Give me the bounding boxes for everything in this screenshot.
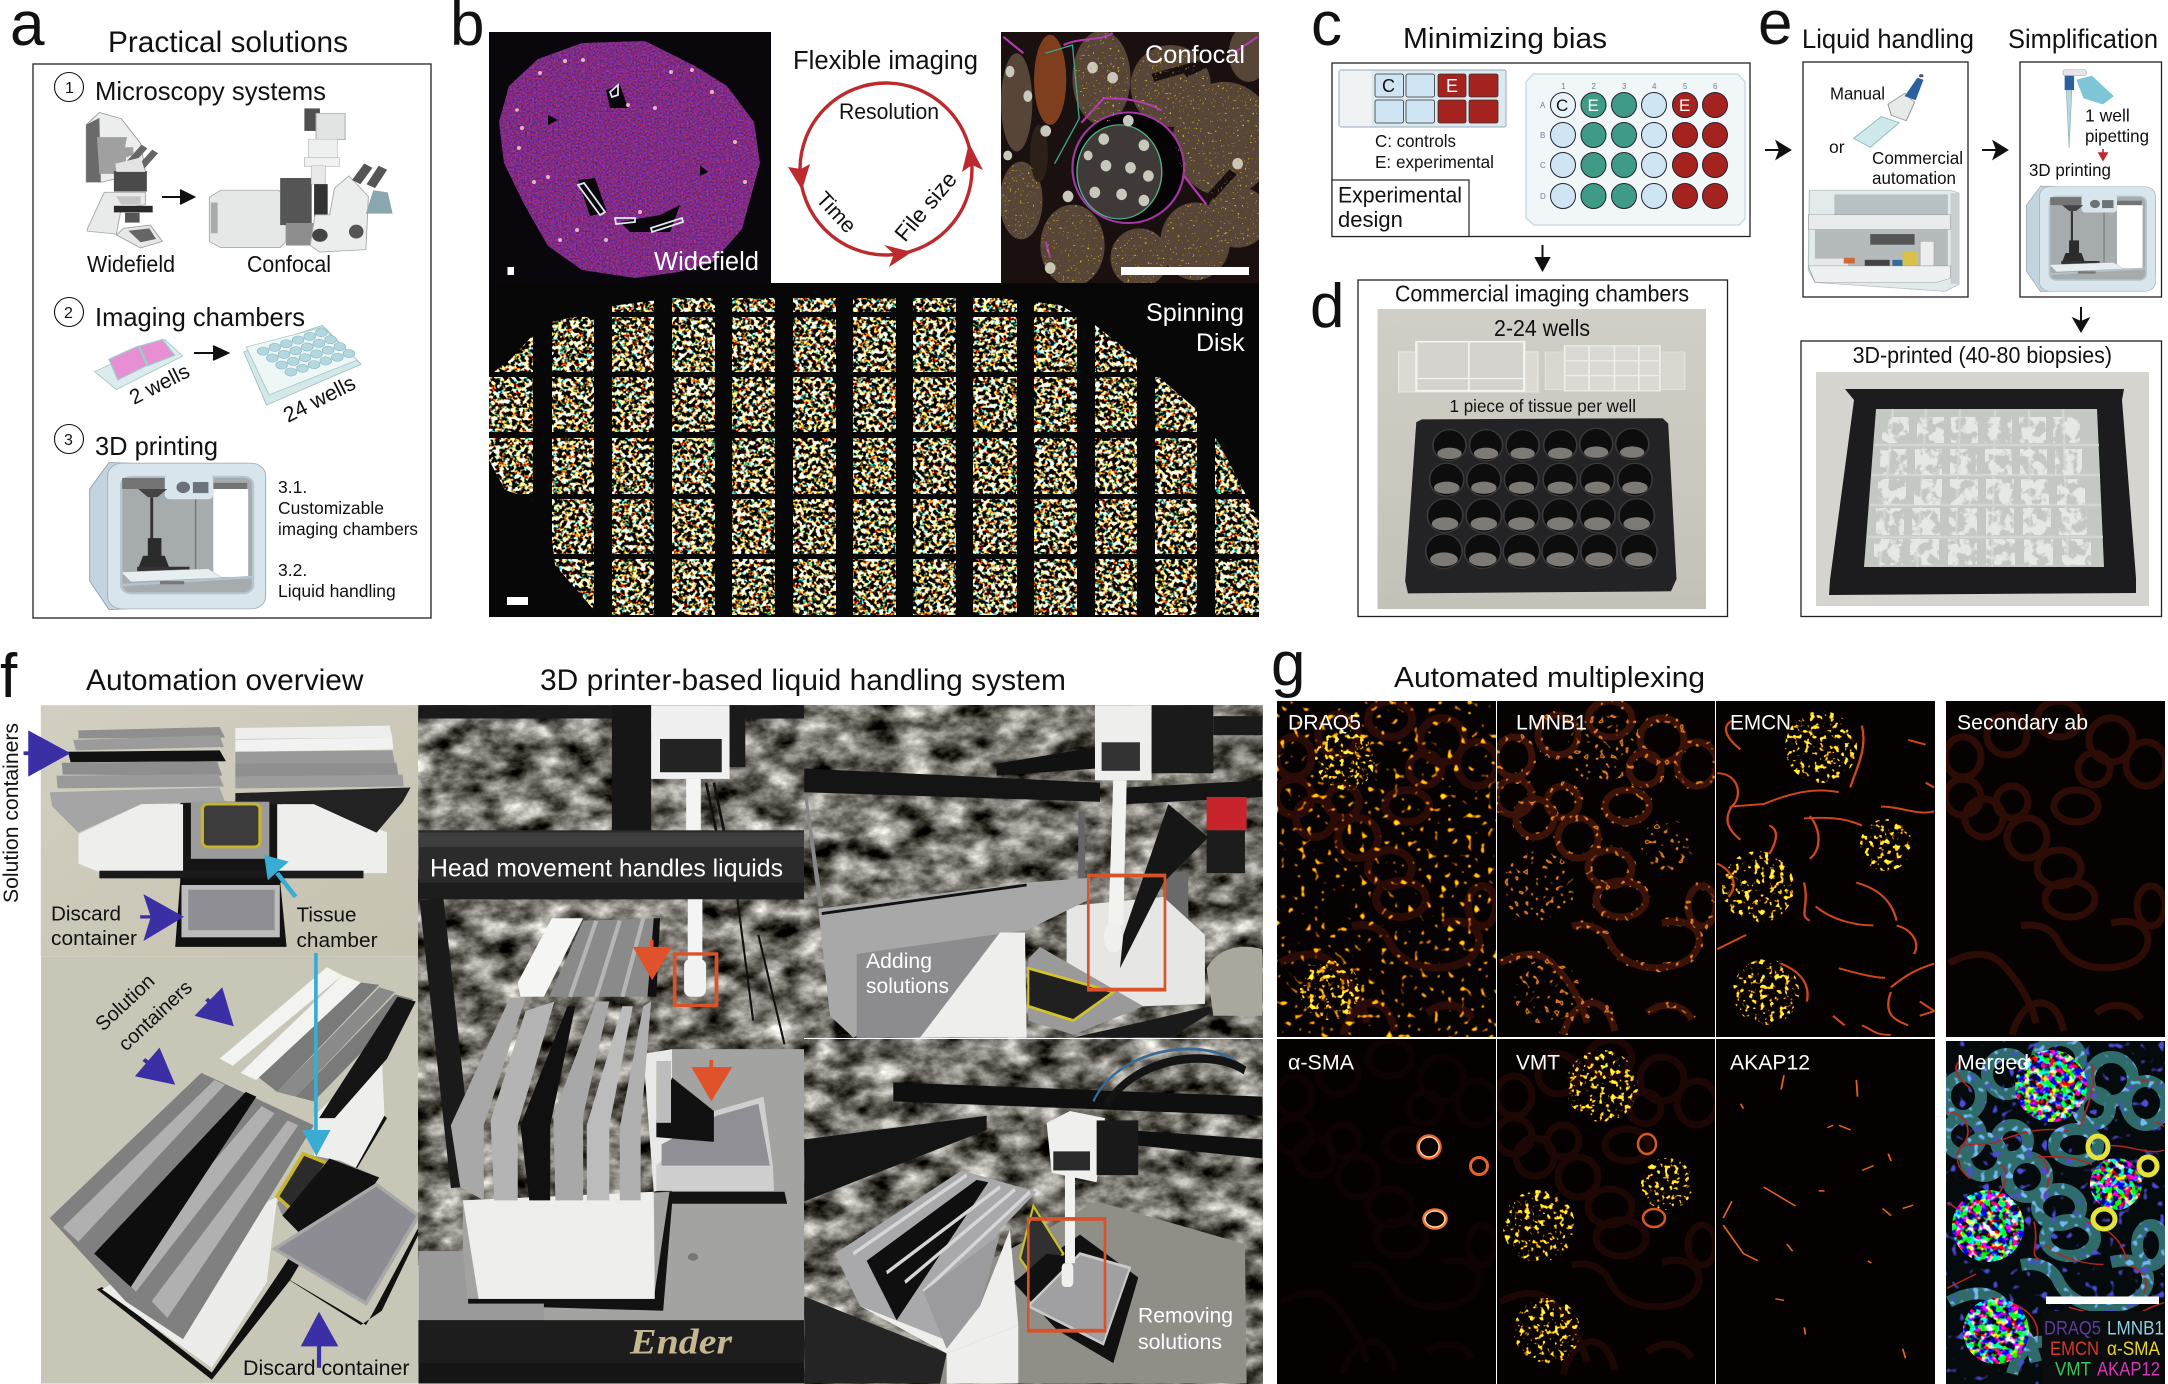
arrow: upper solution containers [195, 987, 234, 1026]
image: LMNB1 [1496, 701, 1717, 1037]
plastic slides [1399, 342, 1685, 392]
label: commercial automation: automation [1872, 168, 1956, 188]
plate row letters: A [1540, 101, 1546, 110]
spinning disk image [489, 283, 1259, 617]
well label E: E [1446, 76, 1458, 96]
well label E red: E [1679, 96, 1690, 115]
box: simplified pipetting and printing [2020, 62, 2162, 297]
icon: manual pipette and plate [1854, 74, 1923, 147]
photo: removing solutions [804, 1039, 1263, 1384]
heading: 3D-printed: 3D-printed (40-80 biopsies) [1853, 342, 2112, 368]
well label C: C [1556, 96, 1568, 115]
icon: 3D printer [90, 462, 266, 610]
panel f: automation overview [0, 642, 1263, 1384]
label: 24 wells: 24 wells [279, 371, 359, 427]
label: AKAP12: AKAP12 [1730, 1052, 1810, 1075]
arrow [1765, 142, 1790, 158]
note: customizable imaging chambers: imaging chambers [278, 519, 418, 539]
icon: confocal microscope [209, 108, 393, 252]
heading: 3D printer-based liquid handling system: 3D printer-based liquid handling system [540, 664, 1066, 697]
box: experimental design: design [1338, 207, 1403, 232]
label: 2-24 wells: 2-24 wells [1494, 315, 1590, 341]
scale bar [1121, 267, 1249, 275]
heading: microscopy systems: Microscopy systems [95, 76, 326, 106]
label: adding solutions: Adding [866, 950, 932, 973]
heading: flexible imaging: Flexible imaging [793, 47, 978, 75]
heading: imaging chambers: Imaging chambers [95, 302, 305, 332]
label: removing solutions: solutions [1138, 1331, 1222, 1354]
panel c: minimizing bias [1311, 0, 1750, 270]
label: spinning disk: Spinning [1146, 299, 1244, 327]
24-well plate layout [1526, 74, 1745, 225]
panel a: practical solutions [10, 0, 431, 618]
arrow [162, 190, 194, 204]
legend: α-SMA [2107, 1339, 2160, 1360]
legend: controls and experimental: E: experimental [1375, 152, 1494, 172]
photo: adding solutions [804, 705, 1263, 1038]
image: alpha-SMA [1276, 1039, 1497, 1384]
plate row letters: D [1540, 192, 1546, 201]
image: AKAP12 [1716, 1039, 1935, 1384]
label: DRAQ5: DRAQ5 [1288, 711, 1361, 734]
heading: automated multiplexing: Automated multiplexing [1394, 662, 1705, 694]
label: 1 well pipetting: 1 well [2085, 106, 2130, 126]
label: discard container: container [51, 928, 137, 950]
widefield image [489, 32, 771, 283]
number 2 glyph: 2 [64, 305, 73, 322]
plate row letters: B [1540, 131, 1545, 140]
panel e: liquid handling and simplification [1758, 0, 2162, 616]
letter g: g [1271, 630, 1305, 699]
label: confocal: Confocal [1145, 41, 1245, 69]
label: commercial automation: Commercial [1872, 148, 1963, 168]
orange arrow: lower [691, 1060, 732, 1101]
label: 3D printing: 3D printing [2029, 160, 2111, 180]
note: liquid handling: 3.2. [278, 560, 307, 580]
plate column numbers: 6 [1713, 82, 1718, 91]
box: 3D-printed chamber [1801, 341, 2162, 616]
confocal image [1001, 32, 1259, 283]
arrow: lower solution containers [135, 1048, 175, 1085]
label: resolution: Resolution [839, 99, 939, 124]
icon: 3D printer [2026, 186, 2155, 292]
number 3 [54, 424, 84, 454]
label: adding solutions: solutions [866, 975, 949, 998]
cycle diagram [788, 83, 983, 267]
arrow [2074, 307, 2088, 331]
legend: VMT [2055, 1360, 2091, 1380]
note: liquid handling: Liquid handling [278, 581, 396, 601]
icon: liquid handling robot [1808, 190, 1959, 291]
label: file size: File size [890, 167, 962, 246]
black 24-well plate [1405, 418, 1677, 593]
arrow: discard container [140, 898, 180, 937]
label: manual: Manual [1830, 84, 1885, 104]
label: tissue chamber: chamber [296, 930, 378, 952]
label: merged: Merged [1957, 1052, 2029, 1075]
plate column numbers: 5 [1683, 82, 1688, 91]
red-orange box: adding [1088, 875, 1165, 990]
small red arrow [2099, 149, 2107, 160]
box d [1358, 280, 1728, 616]
label: head movement handles liquids: Head movement handles liquids [430, 854, 783, 882]
heading: commercial imaging chambers: Commercial imaging chambers [1395, 280, 1689, 306]
label: LMNB1: LMNB1 [1516, 711, 1587, 734]
label: 2 wells: 2 wells [126, 360, 193, 409]
heading: liquid handling: Liquid handling [1802, 24, 1974, 54]
slide layout [1339, 70, 1506, 127]
box: experimental design: Experimental [1338, 182, 1462, 208]
plate column numbers: 2 [1592, 82, 1596, 91]
label: secondary ab: Secondary ab [1957, 711, 2088, 734]
heading: simplification: Simplification [2008, 24, 2158, 54]
label: spinning disk: Disk [1196, 329, 1245, 357]
scale bar [2046, 1296, 2159, 1304]
image: EMCN [1716, 697, 1935, 1037]
arrow: discard container lower [301, 1312, 338, 1368]
box a [33, 64, 431, 618]
plate column numbers: 4 [1652, 82, 1657, 91]
vertical label: solution containers: Solution containers [0, 723, 23, 903]
red-orange box: head tip [675, 954, 717, 1005]
plate column numbers: 3 [1622, 82, 1627, 91]
number 3 glyph: 3 [64, 432, 73, 449]
panel b: flexible imaging [450, 0, 1276, 617]
label: removing solutions: Removing [1138, 1305, 1233, 1328]
label: Ender: Ender [629, 1322, 733, 1362]
well label E green: E [1588, 96, 1599, 115]
icon: widefield microscope [86, 113, 162, 248]
label: alpha-SMA: α-SMA [1288, 1052, 1354, 1075]
well label C: C [1382, 76, 1395, 96]
panel d: commercial imaging chambers [1310, 272, 1728, 616]
box: liquid handling options [1803, 62, 1968, 297]
scale bar [507, 597, 528, 605]
label: 1 well pipetting: pipetting [2085, 126, 2149, 146]
plate row letters: C [1540, 161, 1546, 170]
icon: single-channel pipette with gloved hand [2063, 70, 2114, 148]
label: tissue per well: 1 piece of tissue per well [1450, 396, 1636, 416]
label: VMT: VMT [1516, 1052, 1560, 1075]
long cyan arrow [302, 953, 331, 1156]
image: merged [1945, 1036, 2166, 1384]
red-orange box: removing [1028, 1219, 1105, 1331]
label: confocal: Confocal [247, 251, 331, 277]
number 2 [54, 298, 84, 326]
heading: minimizing bias: Minimizing bias [1403, 23, 1607, 55]
legend: EMCN [2050, 1339, 2099, 1360]
legend: DRAQ5 [2044, 1319, 2101, 1340]
photo: top view of automation system [41, 705, 418, 956]
panel g: automated multiplexing [1271, 630, 2166, 1384]
number 1 glyph: 1 [65, 80, 74, 97]
arrow [194, 346, 228, 360]
icon: 24-well plate [244, 325, 361, 405]
photo: angled view of automation system [41, 956, 418, 1384]
legend [2042, 1311, 2165, 1384]
heading: automation overview: Automation overview [86, 664, 364, 697]
heading: 3D printing: 3D printing [95, 431, 218, 461]
arrow: tissue chamber [264, 855, 295, 897]
box c [1332, 63, 1750, 236]
number 1 [54, 72, 84, 102]
label: discard container: Discard [51, 904, 121, 926]
label: widefield: Widefield [654, 248, 759, 276]
letter d: d [1310, 272, 1344, 341]
label: tissue chamber: Tissue [296, 905, 356, 927]
photo: 3D-printed chamber [1816, 372, 2149, 606]
letter f: f [0, 642, 18, 711]
image: secondary antibody [1945, 701, 2166, 1037]
photo: head movement handles liquids [418, 705, 804, 1384]
legend: controls and experimental: C: controls [1375, 131, 1456, 151]
heading: practical solutions: Practical solutions [108, 26, 348, 59]
note: customizable imaging chambers: 3.1. [278, 477, 307, 497]
label: or: or [1829, 137, 1845, 157]
image: DRAQ5 [1276, 701, 1497, 1037]
image: VMT [1496, 1039, 1717, 1384]
label: EMCN: EMCN [1730, 711, 1791, 734]
box: experimental design [1332, 180, 1469, 236]
legend: AKAP12 [2097, 1360, 2160, 1380]
note: customizable imaging chambers: Customizable [278, 498, 384, 518]
arrow [1536, 245, 1549, 270]
label: containers: containers [114, 977, 197, 1056]
icon: 2-well slide [95, 340, 183, 390]
label: Solution: Solution [91, 970, 159, 1036]
label: time: Time [811, 187, 861, 238]
label: discard container bottom: Discard container [243, 1357, 410, 1380]
arrow: solution containers [24, 734, 66, 773]
photo: chambers and plate [1378, 309, 1706, 609]
label: widefield: Widefield [87, 251, 175, 277]
scale bar [508, 267, 514, 275]
arrow [1982, 142, 2007, 158]
plate column numbers: 1 [1561, 82, 1566, 91]
orange arrow: upper [633, 940, 672, 980]
